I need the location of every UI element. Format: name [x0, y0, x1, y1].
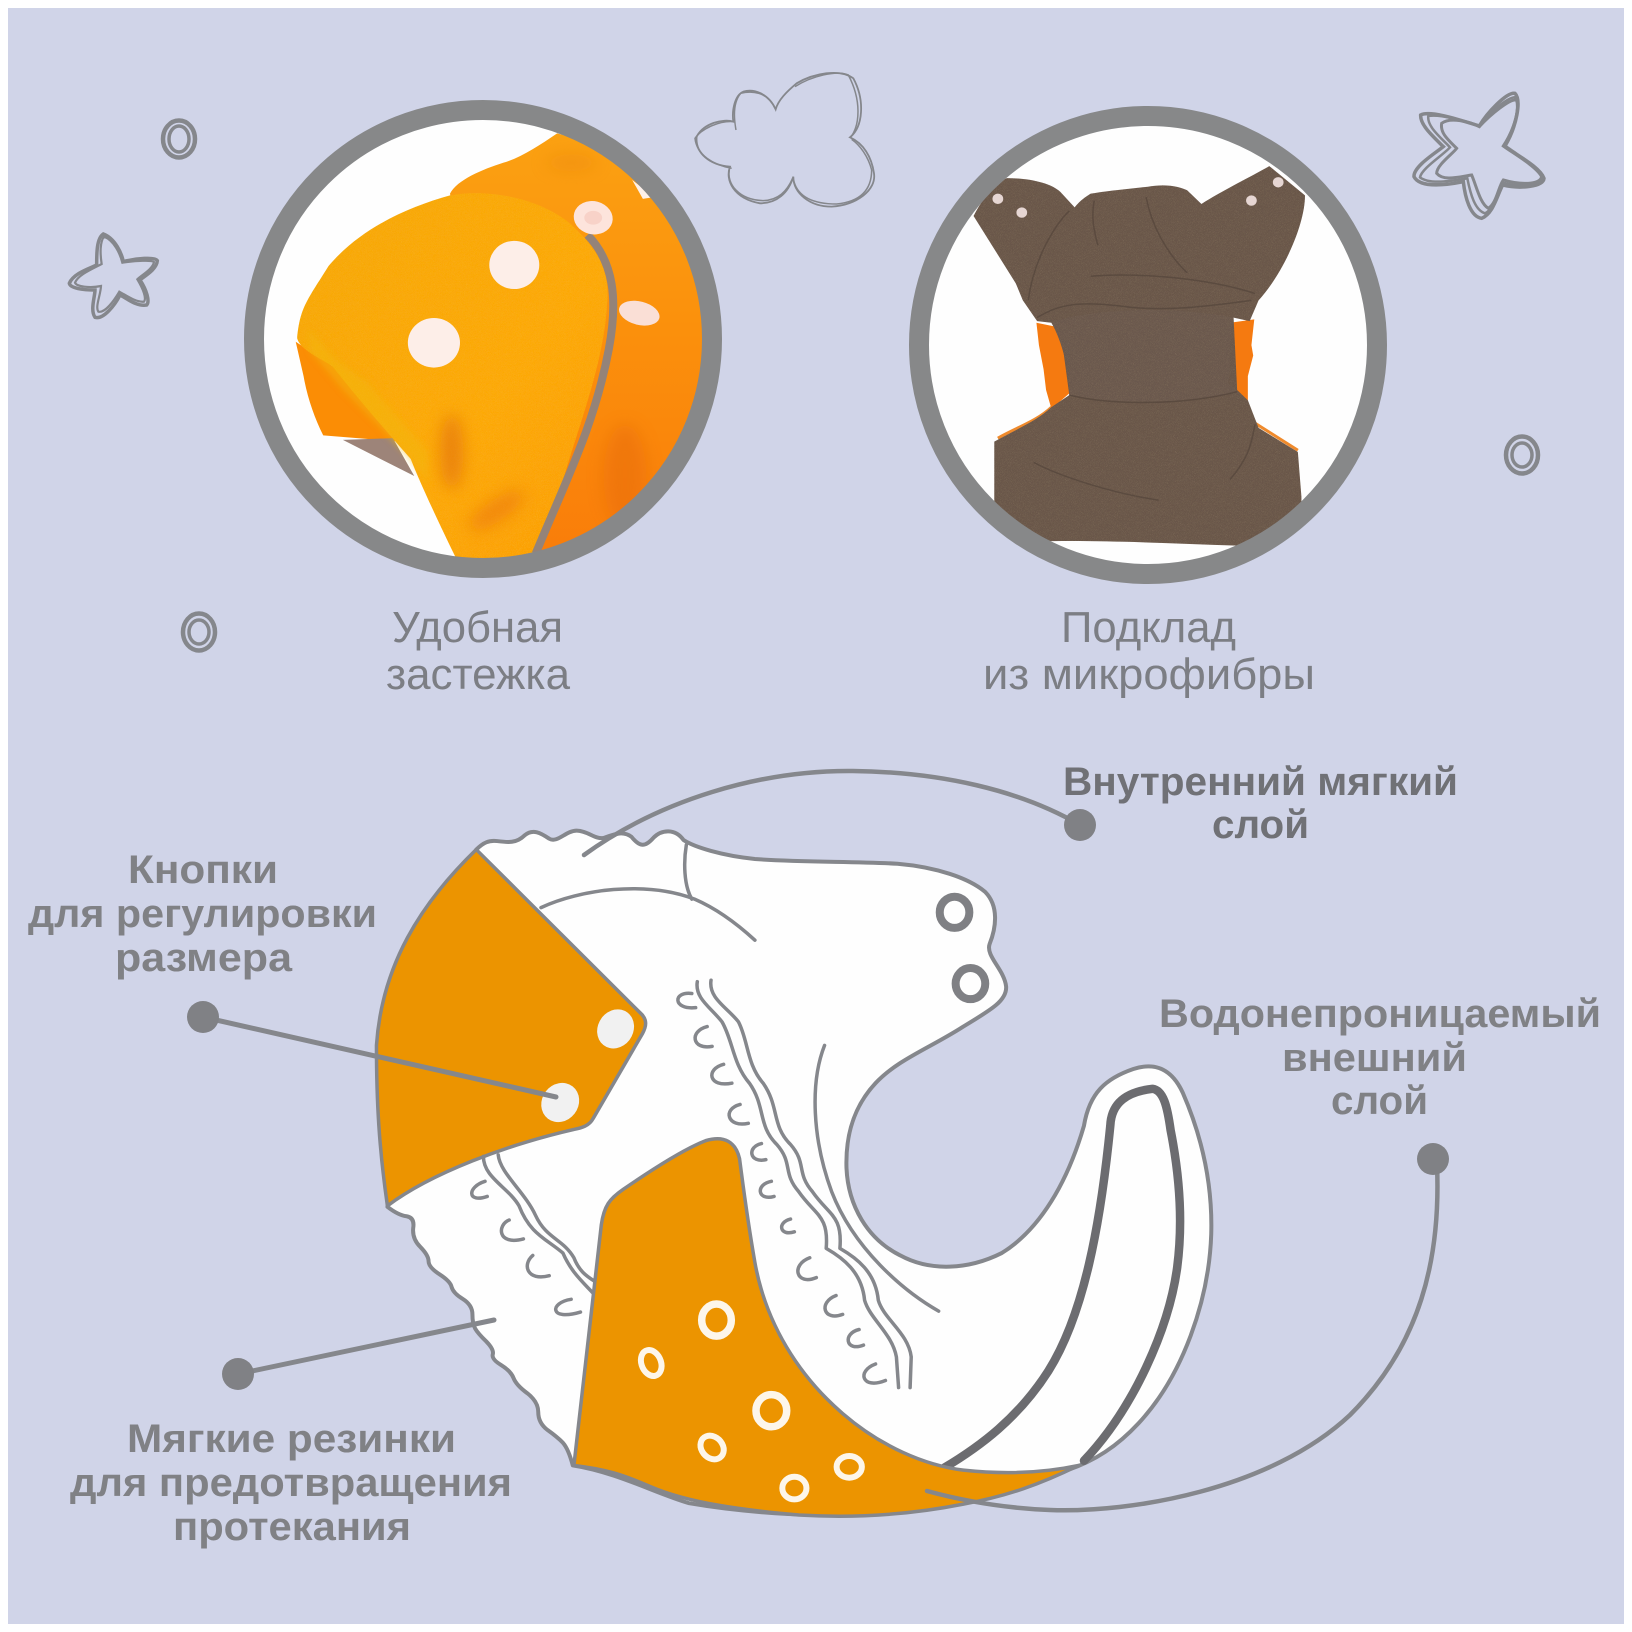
diaper body — [387, 831, 1211, 1515]
fold lines — [1028, 197, 1255, 500]
label: inner soft layer: слой — [1212, 803, 1309, 847]
icon: small ring top left — [163, 120, 195, 158]
callout dot: outer layer — [1417, 1143, 1449, 1175]
caption: microfiber lining — [983, 603, 1315, 699]
orange side gathers — [1036, 319, 1254, 409]
white snap tip at edge — [632, 180, 650, 199]
photo circle ring: microfiber lining — [919, 116, 1377, 574]
orange outer layer — [574, 1139, 1078, 1516]
diaper illustration — [376, 831, 1211, 1516]
orange tab: adjustment snaps — [376, 850, 646, 1206]
label: inner soft layer — [1063, 760, 1458, 847]
snap holes on tab — [592, 1006, 639, 1052]
photo circle: snap fastener — [264, 120, 702, 558]
white gap at bottom — [1050, 541, 1236, 564]
elastic hooks — [472, 993, 885, 1383]
callout line: outer layer — [927, 1165, 1437, 1510]
ring snaps on outer layer — [638, 1304, 862, 1499]
callout dot: inner layer — [1064, 809, 1096, 841]
inner lines — [483, 845, 939, 1388]
callout line: elastic — [238, 1320, 494, 1374]
icon: star left — [69, 234, 157, 318]
caption: snap fastener — [386, 603, 571, 699]
grey edge — [536, 235, 613, 554]
label: adjustment snaps — [28, 848, 377, 980]
photo circle ring: snap fastener — [254, 110, 712, 568]
snaps — [489, 241, 539, 289]
dark inner seam — [944, 1089, 1180, 1468]
label: adjustment snaps: для регулировки — [28, 892, 377, 936]
label: adjustment snaps: размера — [115, 936, 293, 980]
label: waterproof outer layer: Водонепроницаемый — [1159, 992, 1601, 1036]
fabric shadows — [440, 414, 463, 490]
callout dot: elastic — [222, 1358, 254, 1390]
under fold — [296, 342, 400, 442]
photo circle: microfiber lining — [929, 126, 1367, 564]
caption: microfiber lining: Подклад — [1061, 603, 1236, 652]
grey liner — [343, 438, 414, 476]
callout dot: snaps — [187, 1001, 219, 1033]
callout line: inner layer — [584, 771, 1080, 855]
label: soft elastics: для предотвращения — [70, 1461, 512, 1505]
callout line: snaps — [203, 1017, 556, 1097]
label: adjustment snaps: Кнопки — [128, 848, 278, 892]
orange lower hem — [997, 406, 1299, 452]
lining snaps — [992, 194, 1003, 204]
yellow highlight — [312, 348, 422, 477]
icon: small ring right — [1506, 436, 1538, 474]
icon: cloud — [695, 73, 874, 207]
label: soft elastics: Мягкие резинки — [127, 1417, 456, 1461]
back fabric — [450, 133, 702, 550]
main flap — [297, 193, 608, 560]
icon: star right — [1414, 93, 1544, 218]
caption: microfiber lining: из микрофибры — [983, 650, 1315, 699]
label: soft elastics — [70, 1417, 512, 1549]
caption: snap fastener: застежка — [386, 650, 571, 699]
icon: small ring left — [183, 614, 215, 650]
label: inner soft layer: Внутренний мягкий — [1063, 760, 1458, 804]
caption: snap fastener: Удобная — [392, 603, 563, 652]
label: soft elastics: протекания — [173, 1505, 411, 1549]
label: waterproof outer layer: внешний — [1282, 1036, 1467, 1080]
ring snaps on wing — [940, 897, 969, 928]
label: waterproof outer layer: слой — [1331, 1079, 1428, 1123]
centre band — [1052, 323, 1070, 395]
label: waterproof outer layer — [1159, 992, 1601, 1123]
liner body — [974, 166, 1305, 569]
